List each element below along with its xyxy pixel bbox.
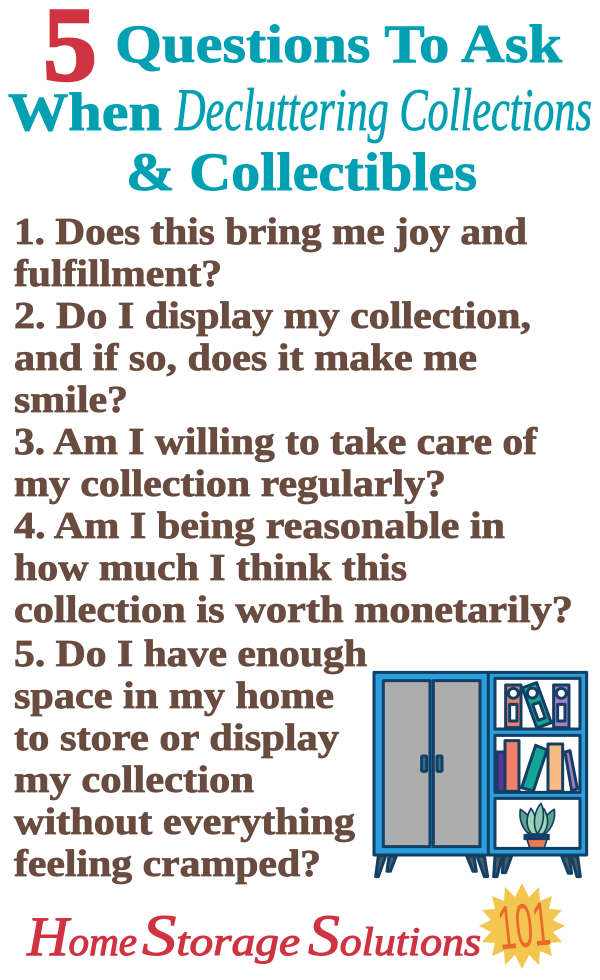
question 5: space in my home (14, 675, 334, 717)
books (497, 741, 577, 791)
question 5: to store or display (14, 717, 339, 759)
cabinet doors (383, 681, 480, 847)
question 1: 1. Does this bring me joy and (14, 211, 527, 253)
title (8, 0, 592, 202)
icon: yellow sun (479, 883, 565, 969)
question 3: 3. Am I willing to take care of (14, 421, 538, 463)
question 2: and if so, does it make me (14, 337, 477, 379)
question 4: how much I think this (14, 547, 407, 589)
shelves (495, 678, 580, 848)
question 5: 5. Do I have enough (14, 633, 367, 675)
question 2: smile? (14, 379, 128, 421)
title line: When: When (8, 82, 162, 142)
logo wordmark: Storage (142, 903, 300, 968)
binders (506, 683, 569, 728)
question 5: my collection (14, 759, 254, 801)
question 5 (14, 633, 367, 885)
title line: Questions To Ask: Questions To Ask (115, 14, 562, 74)
question 4: collection is worth monetarily? (14, 589, 573, 631)
question 1: fulfillment? (14, 253, 222, 295)
door handles (422, 756, 442, 771)
question 2 (14, 295, 531, 421)
icon: bookcase cabinet (374, 672, 587, 877)
question 4 (14, 505, 573, 631)
logo wordmark: Solutions (308, 903, 481, 968)
question 5: feeling cramped? (14, 843, 321, 885)
question 2: 2. Do I display my collection, (14, 295, 531, 337)
question 1 (14, 211, 527, 295)
question 5: without everything (14, 801, 355, 843)
cabinet legs (376, 856, 580, 877)
cabinet body (374, 672, 587, 855)
potted plant (520, 803, 555, 848)
question 3: my collection regularly? (14, 463, 446, 505)
logo wordmark: Home (26, 906, 137, 968)
question 3 (14, 421, 538, 505)
logo wordmark (26, 903, 481, 968)
logo: Home Storage Solutions 101 (26, 883, 565, 969)
question 4: 4. Am I being reasonable in (14, 505, 505, 547)
title line: & Collectibles: & Collectibles (126, 142, 477, 202)
